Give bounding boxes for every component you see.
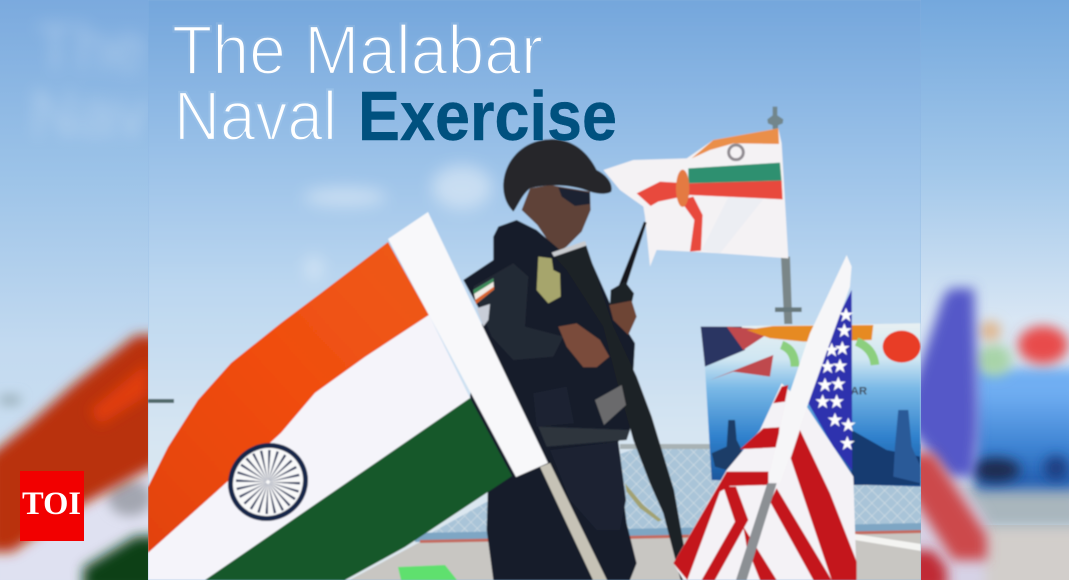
Indian flag on pole	[148, 212, 607, 580]
right blurred side panel	[921, 0, 1069, 580]
blurred ship right	[1044, 456, 1068, 480]
olive badge	[537, 257, 561, 303]
left blurred side panel	[0, 0, 152, 580]
ghost title: The	[36, 10, 146, 84]
ensign wheel	[729, 145, 743, 160]
green band	[205, 398, 512, 580]
saffron band	[148, 242, 429, 553]
near hand	[558, 323, 609, 367]
banner red sun	[883, 331, 921, 363]
banner saffron band	[747, 325, 873, 342]
hoist sleeve	[768, 255, 852, 483]
apron lower	[550, 442, 626, 530]
sunglasses	[558, 187, 590, 206]
white band	[148, 315, 470, 580]
shoulder flag patch	[473, 278, 494, 304]
blurred US flag red	[921, 465, 975, 548]
right deck	[980, 525, 1069, 580]
rifle	[552, 242, 690, 580]
right fence	[921, 497, 1069, 515]
naval mast	[767, 107, 802, 324]
deck railing fence	[415, 447, 921, 542]
stripes field	[673, 383, 857, 580]
banner red stripes	[710, 327, 773, 380]
blurred flag shadow	[108, 480, 152, 516]
stars	[815, 308, 856, 450]
deck red edge line	[420, 530, 921, 543]
deck green patch	[398, 565, 457, 580]
ghost title: Nav	[30, 76, 148, 150]
title line one: The Malabar	[172, 11, 543, 89]
blurred US flag canton	[921, 300, 966, 465]
ensign red lower arm	[680, 197, 703, 252]
sky background	[148, 0, 921, 580]
banner lettering: AR	[851, 386, 867, 398]
banner green arcs	[782, 342, 875, 367]
radio antenna	[618, 222, 647, 287]
title line two bold: Exercise	[358, 77, 617, 155]
flag pole	[736, 483, 777, 580]
ensign green	[688, 163, 782, 183]
blurred Indian flag saffron	[0, 347, 148, 540]
Indian naval ensign flag	[603, 128, 788, 267]
water strip and railing	[415, 444, 921, 542]
blue canton	[808, 290, 852, 471]
ashoka chakra	[217, 432, 319, 532]
blurred saffron highlight	[90, 362, 148, 425]
banner ship left	[712, 420, 743, 470]
cap	[503, 139, 612, 212]
far hand	[609, 301, 637, 335]
vest pocket	[533, 387, 574, 427]
TOI logo: TOI	[22, 486, 81, 522]
skin face and neck	[522, 185, 591, 253]
blurred crane	[0, 396, 20, 404]
rifle sling tail	[625, 483, 662, 522]
ensign saffron	[692, 128, 779, 158]
soldier	[463, 139, 690, 580]
shoulder and sleeve highlight	[473, 263, 563, 360]
distant crane	[148, 399, 174, 403]
rifle magazine	[595, 385, 626, 425]
blurred ship left	[972, 458, 1020, 482]
clouds	[303, 165, 492, 280]
deck white marking	[855, 534, 921, 551]
left sky	[0, 0, 148, 456]
ghost title	[32, 21, 144, 136]
blurred banner orange	[979, 321, 1001, 341]
banner ships right	[852, 430, 920, 485]
arm patch	[477, 304, 490, 327]
title line two light: Naval	[174, 77, 337, 155]
ensign red cross	[637, 181, 783, 206]
hoist sleeve	[388, 212, 548, 477]
vest belt	[538, 427, 630, 447]
blurred banner sun	[1018, 326, 1068, 364]
red stripes	[673, 385, 857, 580]
TOI logo	[20, 471, 84, 541]
blurred Indian flag green	[95, 548, 148, 580]
torso and legs	[463, 220, 637, 580]
US flag on pole	[673, 255, 857, 580]
ensign emblem	[676, 170, 689, 207]
radio	[610, 282, 634, 305]
blurred Indian flag white	[0, 476, 148, 580]
rifle stock edge	[552, 241, 587, 257]
blurred US flag white	[921, 455, 973, 580]
right sky	[921, 0, 1069, 580]
central photo panel	[148, 0, 921, 580]
blurred US flag lower red	[921, 562, 935, 580]
flag pole	[540, 463, 607, 580]
ensign diagonal shade	[702, 197, 763, 253]
exercise banner	[701, 323, 921, 487]
banner US flag	[701, 327, 745, 367]
blurred banner	[987, 380, 1069, 478]
title	[172, 11, 617, 155]
ship deck	[350, 532, 921, 580]
blurred banner green	[976, 344, 1012, 376]
